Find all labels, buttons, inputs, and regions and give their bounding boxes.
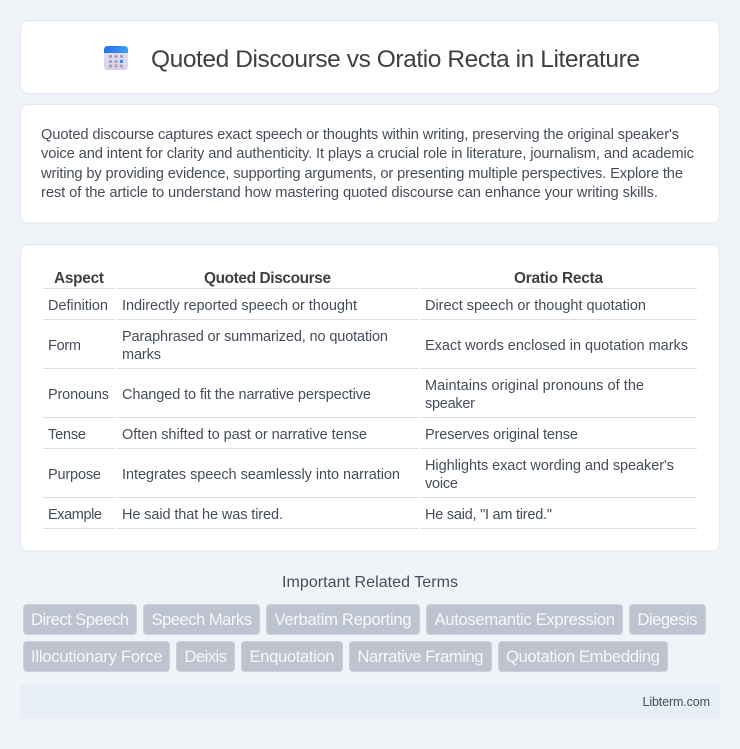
footer credit: Libterm.com [642, 695, 710, 709]
row: purpose: Integrates speech seamlessly into narration [122, 467, 400, 483]
tag: Deixis [176, 642, 234, 672]
row: tense [48, 427, 578, 443]
tag: Narrative Framing: Narrative Framing [358, 647, 484, 666]
tag: Direct Speech: Direct Speech [31, 610, 129, 629]
row: example: He said that he was tired. [122, 507, 283, 523]
row: example: Example [48, 507, 102, 523]
tag: Diegesis: Diegesis [638, 610, 698, 629]
text block: introduction paragraph: voice and intent for clarity and authenticity. It plays a crucial role in literature, journalism, and academic [41, 146, 694, 162]
tag: Enquotation: Enquotation [250, 647, 334, 666]
panel: title card [20, 20, 720, 94]
text block: introduction paragraph: rest of the article to understand how mastering quoted discourse can enhance your writing skills. [41, 185, 658, 201]
row: purpose [48, 458, 674, 492]
row: tense: Often shifted to past or narrative tense [122, 427, 367, 443]
row: definition: Indirectly reported speech or thought [122, 298, 357, 314]
row: definition: Definition [48, 298, 108, 314]
row: definition [48, 298, 646, 314]
tag: Illocutionary Force: Illocutionary Force [31, 647, 162, 666]
tag: Diegesis [630, 604, 706, 634]
tag: Speech Marks [144, 604, 260, 634]
text block: introduction paragraph [40, 127, 694, 201]
table header: Aspect [54, 270, 104, 287]
title: Quoted Discourse vs Oratio Recta in Literature [151, 46, 640, 73]
row: example [48, 507, 552, 523]
footer bar [20, 685, 720, 719]
tag: Speech Marks: Speech Marks [152, 610, 252, 629]
tag: Deixis: Deixis [184, 647, 227, 666]
row: example: He said, "I am tired." [425, 507, 552, 523]
text block: introduction paragraph: Quoted discourse captures exact speech or thoughts within writing, preserving the original speaker's [41, 127, 679, 143]
row: tense: Tense [48, 427, 86, 443]
row: form: Paraphrased or summarized, no quotation [122, 329, 388, 345]
panel: introduction [20, 104, 720, 223]
row: form: Form [48, 338, 81, 354]
icon: calendar [104, 46, 128, 70]
tag: Verbatim Reporting: Verbatim Reporting [274, 610, 412, 629]
table rules [43, 288, 697, 529]
heading: important related terms: Important Related Terms [282, 574, 458, 591]
table header: Oratio Recta [514, 270, 603, 287]
tag: Enquotation [242, 642, 342, 672]
tag: Quotation Embedding [498, 642, 668, 672]
tag: Quotation Embedding: Quotation Embedding [506, 647, 660, 666]
tag: Narrative Framing [350, 642, 492, 672]
row: pronouns: Pronouns [48, 387, 109, 403]
row: pronouns: Maintains original pronouns of the [425, 378, 644, 394]
tag: Verbatim Reporting [266, 604, 420, 634]
row: purpose: Highlights exact wording and speaker's [425, 458, 674, 474]
row: form [48, 329, 688, 363]
row: form: marks [122, 347, 161, 363]
row: purpose: voice [425, 476, 458, 492]
table header: Quoted Discourse [204, 270, 331, 287]
row: pronouns: Changed to fit the narrative perspective [122, 387, 371, 403]
tag: Autosemantic Expression: Autosemantic Expression [434, 610, 615, 629]
row: form: Exact words enclosed in quotation marks [425, 338, 688, 354]
row: purpose: Purpose [48, 467, 101, 483]
row: pronouns: speaker [425, 396, 475, 412]
tags: related terms [24, 604, 706, 672]
row: definition: Direct speech or thought quotation [425, 298, 646, 314]
row: pronouns [48, 378, 644, 412]
tag: Illocutionary Force [24, 642, 170, 672]
panel: comparison table [20, 244, 720, 551]
row: tense: Preserves original tense [425, 427, 578, 443]
table header [54, 270, 603, 287]
text block: introduction paragraph: writing by providing evidence, supporting arguments, or presenting multiple perspectives. Explore the [40, 166, 683, 182]
tag: Direct Speech [24, 604, 136, 634]
tag: Autosemantic Expression [426, 604, 622, 634]
